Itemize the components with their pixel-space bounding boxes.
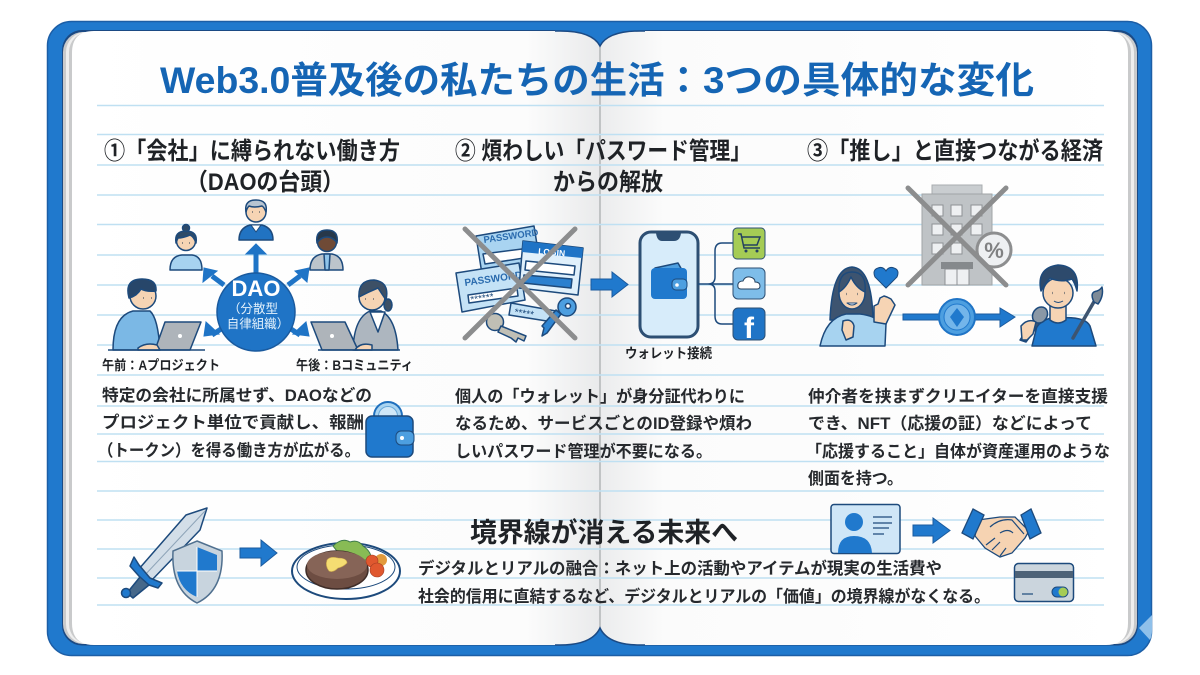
- text block: change 1: プロジェクト単位で貢献し、報酬: [102, 412, 364, 432]
- illustration: steak on plate: [292, 540, 400, 599]
- arrow with token: [903, 299, 1015, 335]
- fan woman: [820, 267, 895, 346]
- icon: cart: [733, 228, 765, 259]
- text block: change 1: （トークン）を得る働き方が広がる。: [98, 440, 360, 460]
- illustration: DAO network: [102, 200, 413, 373]
- connectors: [698, 243, 733, 324]
- creator man: [1020, 265, 1102, 346]
- arrow: game to real: [240, 540, 277, 566]
- DAO hub circle: （分散型: [228, 301, 278, 316]
- heading: change 1: （DAOの台頭）: [186, 169, 344, 196]
- heading: change 3: ③「推し」と直接つながる経済: [807, 137, 1103, 165]
- person: top left: [170, 224, 202, 270]
- person with laptop: afternoon: [311, 280, 400, 350]
- text block: change 2: [455, 386, 752, 461]
- DAO hub circle: 自律組織）: [227, 317, 289, 331]
- arrows from DAO hub: [203, 244, 309, 336]
- label: wallet connection: ウォレット接続: [625, 345, 712, 361]
- text block: change 1: 特定の会社に所属せず、DAOなどの: [102, 386, 372, 405]
- icon: wallet with coin: [366, 402, 414, 457]
- icon: ID card: [831, 504, 900, 554]
- illustration: password management crossed out: [456, 226, 583, 342]
- text block: change 3: [806, 386, 1110, 488]
- arrow: identity to trust: [913, 518, 950, 543]
- icon: handshake: [962, 509, 1041, 557]
- login card: LOGIN: [538, 246, 566, 258]
- heading: change 2: ② 煩わしい「パスワード管理」: [455, 138, 751, 165]
- text block: change 3: でき、NFT（応援の証）などによって: [808, 414, 1092, 433]
- key gray: [486, 314, 526, 342]
- text block: change 2: なるため、サービスごとのID登録や煩わ: [455, 413, 752, 433]
- icon: cloud: [733, 268, 765, 299]
- building crossed out: %: [984, 238, 1004, 263]
- person: top center: [239, 200, 273, 240]
- icon: facebook: f: [744, 312, 755, 345]
- password card back: PASSWORD: [483, 227, 539, 246]
- person with laptop: morning: [108, 279, 205, 350]
- title: Web3.0普及後の私たちの生活：: [160, 60, 702, 101]
- password card front: PASSWORD: [464, 270, 523, 289]
- illustration: sword and shield: [122, 508, 222, 603]
- small password field: *****: [514, 307, 535, 321]
- text block: change 3: 側面を持つ。: [808, 469, 903, 488]
- spine notches in cover: [555, 28, 645, 647]
- password card front: [456, 263, 525, 312]
- arrow: to wallet: [591, 272, 628, 297]
- title: [160, 60, 1034, 101]
- key blue: [542, 298, 576, 336]
- text block: change 2: しいパスワード管理が不要になる。: [455, 441, 712, 461]
- icon: credit card: [1014, 564, 1074, 602]
- smartphone: [640, 232, 698, 337]
- DAO hub circle: [217, 273, 295, 351]
- text block: change 3: 「応援すること」自体が資産運用のような: [806, 441, 1110, 461]
- illustration: phone wallet connection: [625, 228, 765, 361]
- text block: change 1: [98, 386, 372, 460]
- text block: change 3: 仲介者を挟まずクリエイターを直接支援: [808, 386, 1109, 406]
- heading: change 1: [104, 137, 400, 196]
- DAO hub circle: DAO: [232, 276, 280, 301]
- person: top right: [310, 230, 343, 270]
- text block: digital and real: 社会的信用に直結するなど、デジタルとリアルの「価値」の境界線がなくなる。: [418, 586, 990, 606]
- heading: change 2: [455, 138, 751, 196]
- label: afternoon community: 午後：Bコミュニティ: [296, 357, 413, 373]
- cross: [465, 229, 575, 338]
- heading: change 2: からの解放: [553, 169, 663, 196]
- label: morning project: 午前：Aプロジェクト: [102, 357, 220, 373]
- text block: digital and real: [418, 558, 990, 606]
- wallet icon: [651, 263, 687, 299]
- heading: future without boundaries: 境界線が消える未来へ: [470, 517, 738, 548]
- password card front: ******: [470, 292, 495, 306]
- text block: change 2: 個人の「ウォレット」が身分証代わりに: [455, 386, 745, 406]
- icon: heart: [874, 267, 898, 288]
- building crossed out: [908, 185, 1011, 285]
- title: 3つの具体的な変化: [703, 60, 1034, 101]
- text block: digital and real: デジタルとリアルの融合：ネット上の活動やアイテムが現実の生活費や: [418, 558, 942, 578]
- heading: change 1: ①「会社」に縛られない働き方: [104, 137, 400, 165]
- illustration: direct support economy: [820, 185, 1102, 346]
